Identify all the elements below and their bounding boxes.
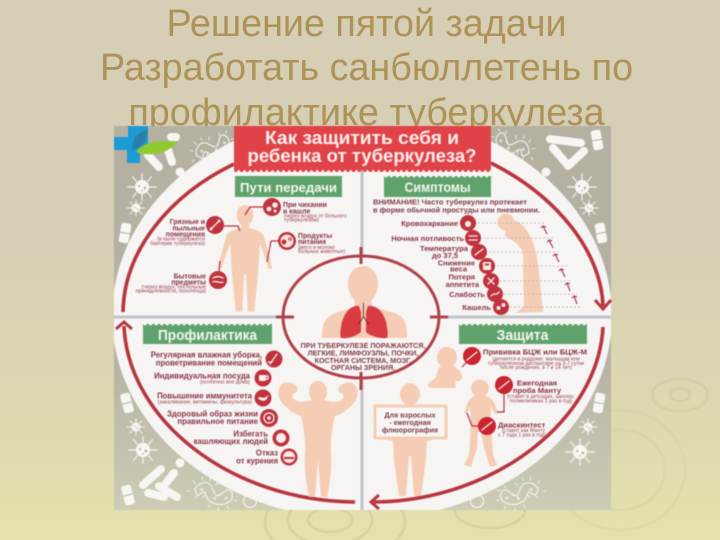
warning text	[373, 198, 540, 214]
text: BCG vaccine	[483, 348, 587, 371]
baby figure	[428, 347, 462, 388]
text: Mantoux: (ставят в детсадах, школах,	[507, 394, 575, 400]
panel: prevention	[143, 324, 358, 497]
symptom: temperature: до 37,5	[432, 251, 458, 260]
text: BCG vaccine: после рождения, в 7 и 14 лет)	[500, 365, 572, 371]
center text: ОРГАНЫ ЗРЕНИЯ.	[331, 364, 395, 372]
heading: prevention: Профилактика	[158, 327, 258, 344]
text: household	[136, 274, 206, 294]
center text: ЛЕГКИЕ, ЛИМФОУЗЛЫ, ПОЧКИ,	[308, 350, 418, 358]
icon: dust	[206, 216, 224, 234]
warning text: в форме обычной простуды или пневмонии.	[373, 206, 540, 214]
item: avoid coughing people: кашляющих людей	[194, 437, 268, 446]
infographic poster	[112, 112, 612, 520]
item: healthy lifestyle: Здоровый образ жизни	[167, 410, 258, 418]
center text: КОСТНАЯ СИСТЕМА, МОЗГ,	[315, 357, 411, 365]
warning text: ВНИМАНИЕ! Часто туберкулез протекает	[373, 198, 528, 206]
symptom: appetite loss	[446, 272, 499, 289]
item: avoid coughing people	[194, 430, 290, 446]
adult with poster: флюорография	[382, 426, 438, 434]
text: dust: помещения	[166, 232, 205, 238]
item: immunity: (закаливание, витамины, физкультура)	[158, 400, 252, 406]
icon: sneeze	[263, 198, 281, 216]
symptom: temperature	[420, 244, 487, 260]
body figure	[218, 205, 272, 312]
item: healthy lifestyle: правильное питание	[177, 417, 259, 426]
heading: symptoms	[384, 176, 491, 197]
item: own dishes	[154, 370, 272, 386]
bust silhouette	[322, 266, 407, 338]
title	[100, 2, 633, 133]
text: dust: Грязные и	[170, 219, 205, 226]
text: Mantoux: Ежегодная	[517, 378, 557, 388]
symptom: cough: Кашель	[462, 303, 491, 312]
muscular figure	[278, 381, 358, 497]
text: Mantoux	[507, 378, 575, 404]
text: Diaskintest	[498, 420, 546, 438]
text: food: (мясо и молоко	[298, 245, 335, 251]
connectors	[462, 362, 504, 426]
text: food: питания	[298, 239, 326, 246]
icon: Diaskintest	[478, 417, 496, 435]
panel: protection	[375, 324, 587, 496]
text: food: больных животных)	[298, 249, 345, 255]
item: own dishes: (особенно вне дома)	[200, 380, 250, 386]
text: sneeze	[283, 202, 347, 224]
symptom: appetite loss: аппетита	[446, 280, 480, 289]
text: dust: (в пыли содержатся	[157, 236, 205, 242]
text: household: предметы	[171, 280, 206, 286]
text: Diaskintest: (ставят как Манту	[502, 428, 545, 434]
item: no smoking: от курения	[236, 456, 278, 466]
symptom: weakness: Слабость	[449, 290, 485, 299]
lungs	[340, 303, 388, 338]
background ripples	[265, 379, 708, 540]
text: BCG vaccine: Прививка БЦЖ или БЦЖ-М	[483, 348, 587, 356]
item: no smoking: Отказ	[256, 448, 278, 458]
text: sneeze: При чихании	[283, 202, 327, 209]
text: sneeze: (через воздух от больного	[284, 214, 347, 220]
symptom: haemoptysis: Кровохаркание	[401, 219, 458, 228]
icon: Mantoux	[495, 376, 513, 394]
item: immunity: Повышение иммунитета	[157, 392, 253, 400]
heading: protection: Защита	[496, 327, 549, 344]
symptom arrows	[541, 226, 577, 304]
text: dust	[150, 219, 205, 247]
center circle	[276, 247, 448, 390]
banner	[234, 126, 491, 170]
item: cleaning: проветривание помещений	[156, 358, 262, 368]
text: Mantoux: поликлиниках 1 раз в год)	[510, 398, 572, 404]
adult with poster	[375, 383, 446, 496]
heading: transmission: Пути передачи	[240, 180, 337, 195]
item: healthy lifestyle	[167, 409, 278, 427]
symptom: weight loss: Снижение	[438, 258, 475, 268]
item: cleaning	[151, 350, 282, 368]
text: household: (через воздух, постельные	[142, 284, 206, 290]
panel: symptoms	[373, 176, 582, 315]
text: dust: пыльные	[172, 226, 205, 232]
symptom: appetite loss: Потеря	[448, 272, 475, 282]
connectors	[219, 207, 279, 272]
text: household: принадлежности, полотенца)	[136, 288, 206, 294]
adult with poster: Для взрослых	[384, 410, 436, 420]
center text: ПРИ ТУБЕРКУЛЕЗЕ ПОРАЖАЮТСЯ,	[301, 342, 425, 350]
heading: symptoms: Симптомы	[404, 179, 470, 195]
symptom: night sweats: Ночная потливость	[391, 234, 464, 243]
logo: cross and leaf	[114, 126, 177, 163]
banner: Как защитить себя и	[265, 127, 459, 148]
center text	[301, 342, 425, 372]
symptom: weakness	[449, 286, 503, 302]
text: food	[298, 233, 345, 255]
text: food: Продукты	[298, 233, 332, 240]
icon: BCG vaccine	[463, 347, 481, 365]
panel: transmission routes	[136, 176, 347, 312]
item: immunity	[157, 390, 272, 406]
adult with poster: - ежегодная	[389, 418, 431, 427]
item: own dishes: Индивидуальная посуда	[154, 372, 251, 380]
symptom: temperature: Температура	[420, 244, 469, 253]
white round field	[112, 112, 612, 520]
big arrow arcs	[116, 163, 611, 509]
text: Mantoux: проба Манту	[513, 386, 562, 395]
item: avoid coughing people: Избегать	[233, 430, 268, 438]
dotted guide lines	[478, 223, 582, 307]
text: household: Бытовые	[174, 274, 206, 280]
heading: protection	[459, 324, 587, 344]
child figure	[464, 380, 498, 467]
text: Diaskintest: с 7 года 1 раз в год)	[498, 432, 546, 438]
symptom: haemoptysis	[401, 215, 476, 231]
icon: household items	[209, 271, 227, 289]
text: BCG vaccine: туберкулезном диспансере на 3-7 сутки	[488, 361, 584, 367]
dividers	[114, 170, 611, 510]
poster background corners	[114, 126, 611, 510]
text: dust: бактерии туберкулеза)	[150, 241, 205, 247]
corner decorations	[118, 127, 608, 517]
symptom: cough	[462, 299, 509, 315]
title: профилактике туберкулеза	[128, 91, 605, 133]
title: Разработать санбюллетень по	[100, 46, 633, 88]
symptom: night sweats	[391, 230, 481, 246]
symptom: weight loss	[438, 258, 495, 274]
coughing figure	[498, 214, 543, 313]
symptom: weight loss: веса	[450, 264, 468, 274]
title: Решение пятой задачи	[166, 2, 567, 44]
heading: transmission	[235, 176, 342, 197]
item: no smoking	[236, 448, 298, 466]
banner: ребенка от туберкулеза?	[248, 145, 476, 166]
item: cleaning: Регулярная влажная уборка,	[151, 350, 262, 360]
text: sneeze: и кашле	[283, 208, 310, 216]
icon: food	[278, 232, 296, 250]
text: BCG vaccine: (делается в роддоме, малышам или	[492, 356, 580, 362]
text: sneeze: туберкулезом)	[284, 218, 319, 224]
text: Diaskintest: Диаскинтест	[498, 420, 546, 430]
